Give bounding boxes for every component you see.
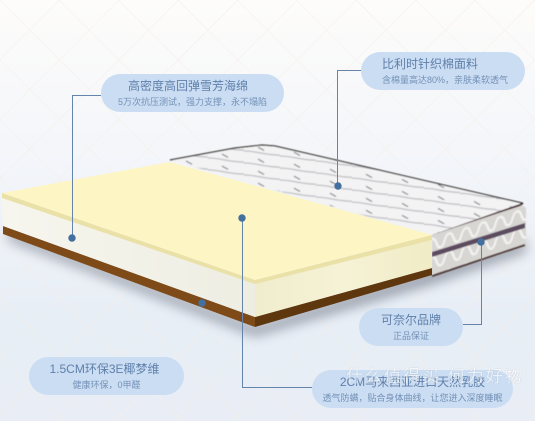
callout: memory foam: 5万次抗压测试，强力支撑，永不塌陷 [118,97,267,107]
callout: latex: 透气防螨，贴合身体曲线，让您进入深度睡眠 [322,393,502,403]
coconut fibre layer left [3,226,255,327]
latex layer right [255,240,432,317]
callout: coconut fibre: 1.5CM环保3E椰梦维 [49,362,160,376]
mattress side [432,203,526,277]
callout: coconut fibre: 健康环保，0甲醛 [72,380,140,390]
latex layer left [2,197,255,317]
foam layers [2,162,432,327]
spring mattress [170,145,526,277]
callout: latex [312,370,513,408]
callout lines [72,70,482,388]
callout: memory foam: 高密度高回弹雪芳海绵 [128,79,248,93]
callout: knit fabric: 含棉量高达80%，亲肤柔软透气 [382,75,508,85]
mattress top [170,145,522,235]
callout: brand: 正品保证 [393,331,429,341]
callout dots [68,182,485,307]
callout: memory foam [101,74,284,112]
memory foam top [2,162,432,280]
callout: latex: 2CM马来西亚进口天然乳胶 [340,375,485,389]
coconut fibre layer right [255,268,432,327]
callout: brand [359,308,463,346]
callout: coconut fibre [29,357,184,395]
drop shadow [8,230,526,336]
callout: brand: 可奈尔品牌 [381,313,441,327]
memory foam rim [2,193,432,284]
watermark: 什么值得买 何为好物 [346,367,524,386]
callout: knit fabric: 比利时针织棉面料 [382,57,478,71]
callout: knit fabric [361,52,525,90]
